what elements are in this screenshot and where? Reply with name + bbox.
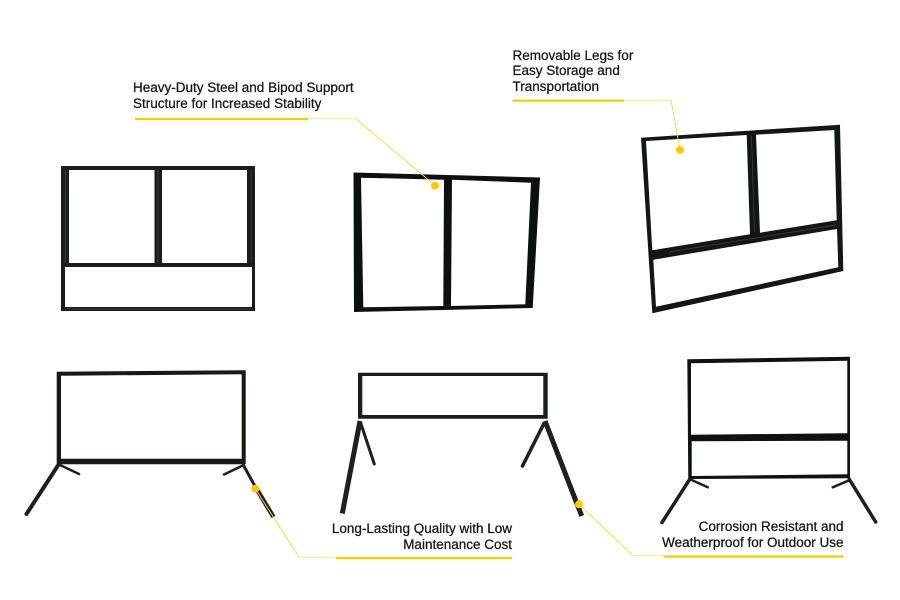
frame: angled view without lower panel bbox=[354, 172, 540, 312]
frame: sign stand with low splayed legs bbox=[26, 370, 274, 517]
callout: corrosion resistant: Corrosion Resistant and bbox=[699, 519, 844, 534]
callout: long-lasting quality: Long-Lasting Quality with Low bbox=[332, 521, 512, 536]
callout: heavy-duty steel bbox=[133, 80, 439, 190]
callout: removable legs bbox=[512, 48, 684, 154]
callout: removable legs: Removable Legs for bbox=[512, 48, 634, 63]
callout: corrosion resistant: Weatherproof for Outdoor Use bbox=[662, 535, 844, 550]
callout: removable legs: Easy Storage and bbox=[512, 63, 620, 78]
frame: flat front view with two upper panels bbox=[61, 166, 255, 311]
callout: long-lasting quality: Maintenance Cost bbox=[403, 537, 512, 552]
frame: short banner stand with tall legs bbox=[342, 373, 582, 516]
callout: corrosion resistant bbox=[575, 500, 844, 556]
frame: tall sign stand with central bar bbox=[662, 357, 876, 522]
callout: removable legs: Transportation bbox=[512, 79, 599, 94]
callout: heavy-duty steel: Structure for Increased Stability bbox=[133, 96, 322, 111]
frame: tilted view with lower panel bbox=[641, 125, 843, 313]
callout: long-lasting quality bbox=[251, 485, 512, 558]
callout: heavy-duty steel: Heavy-Duty Steel and Bipod Support bbox=[133, 80, 354, 95]
